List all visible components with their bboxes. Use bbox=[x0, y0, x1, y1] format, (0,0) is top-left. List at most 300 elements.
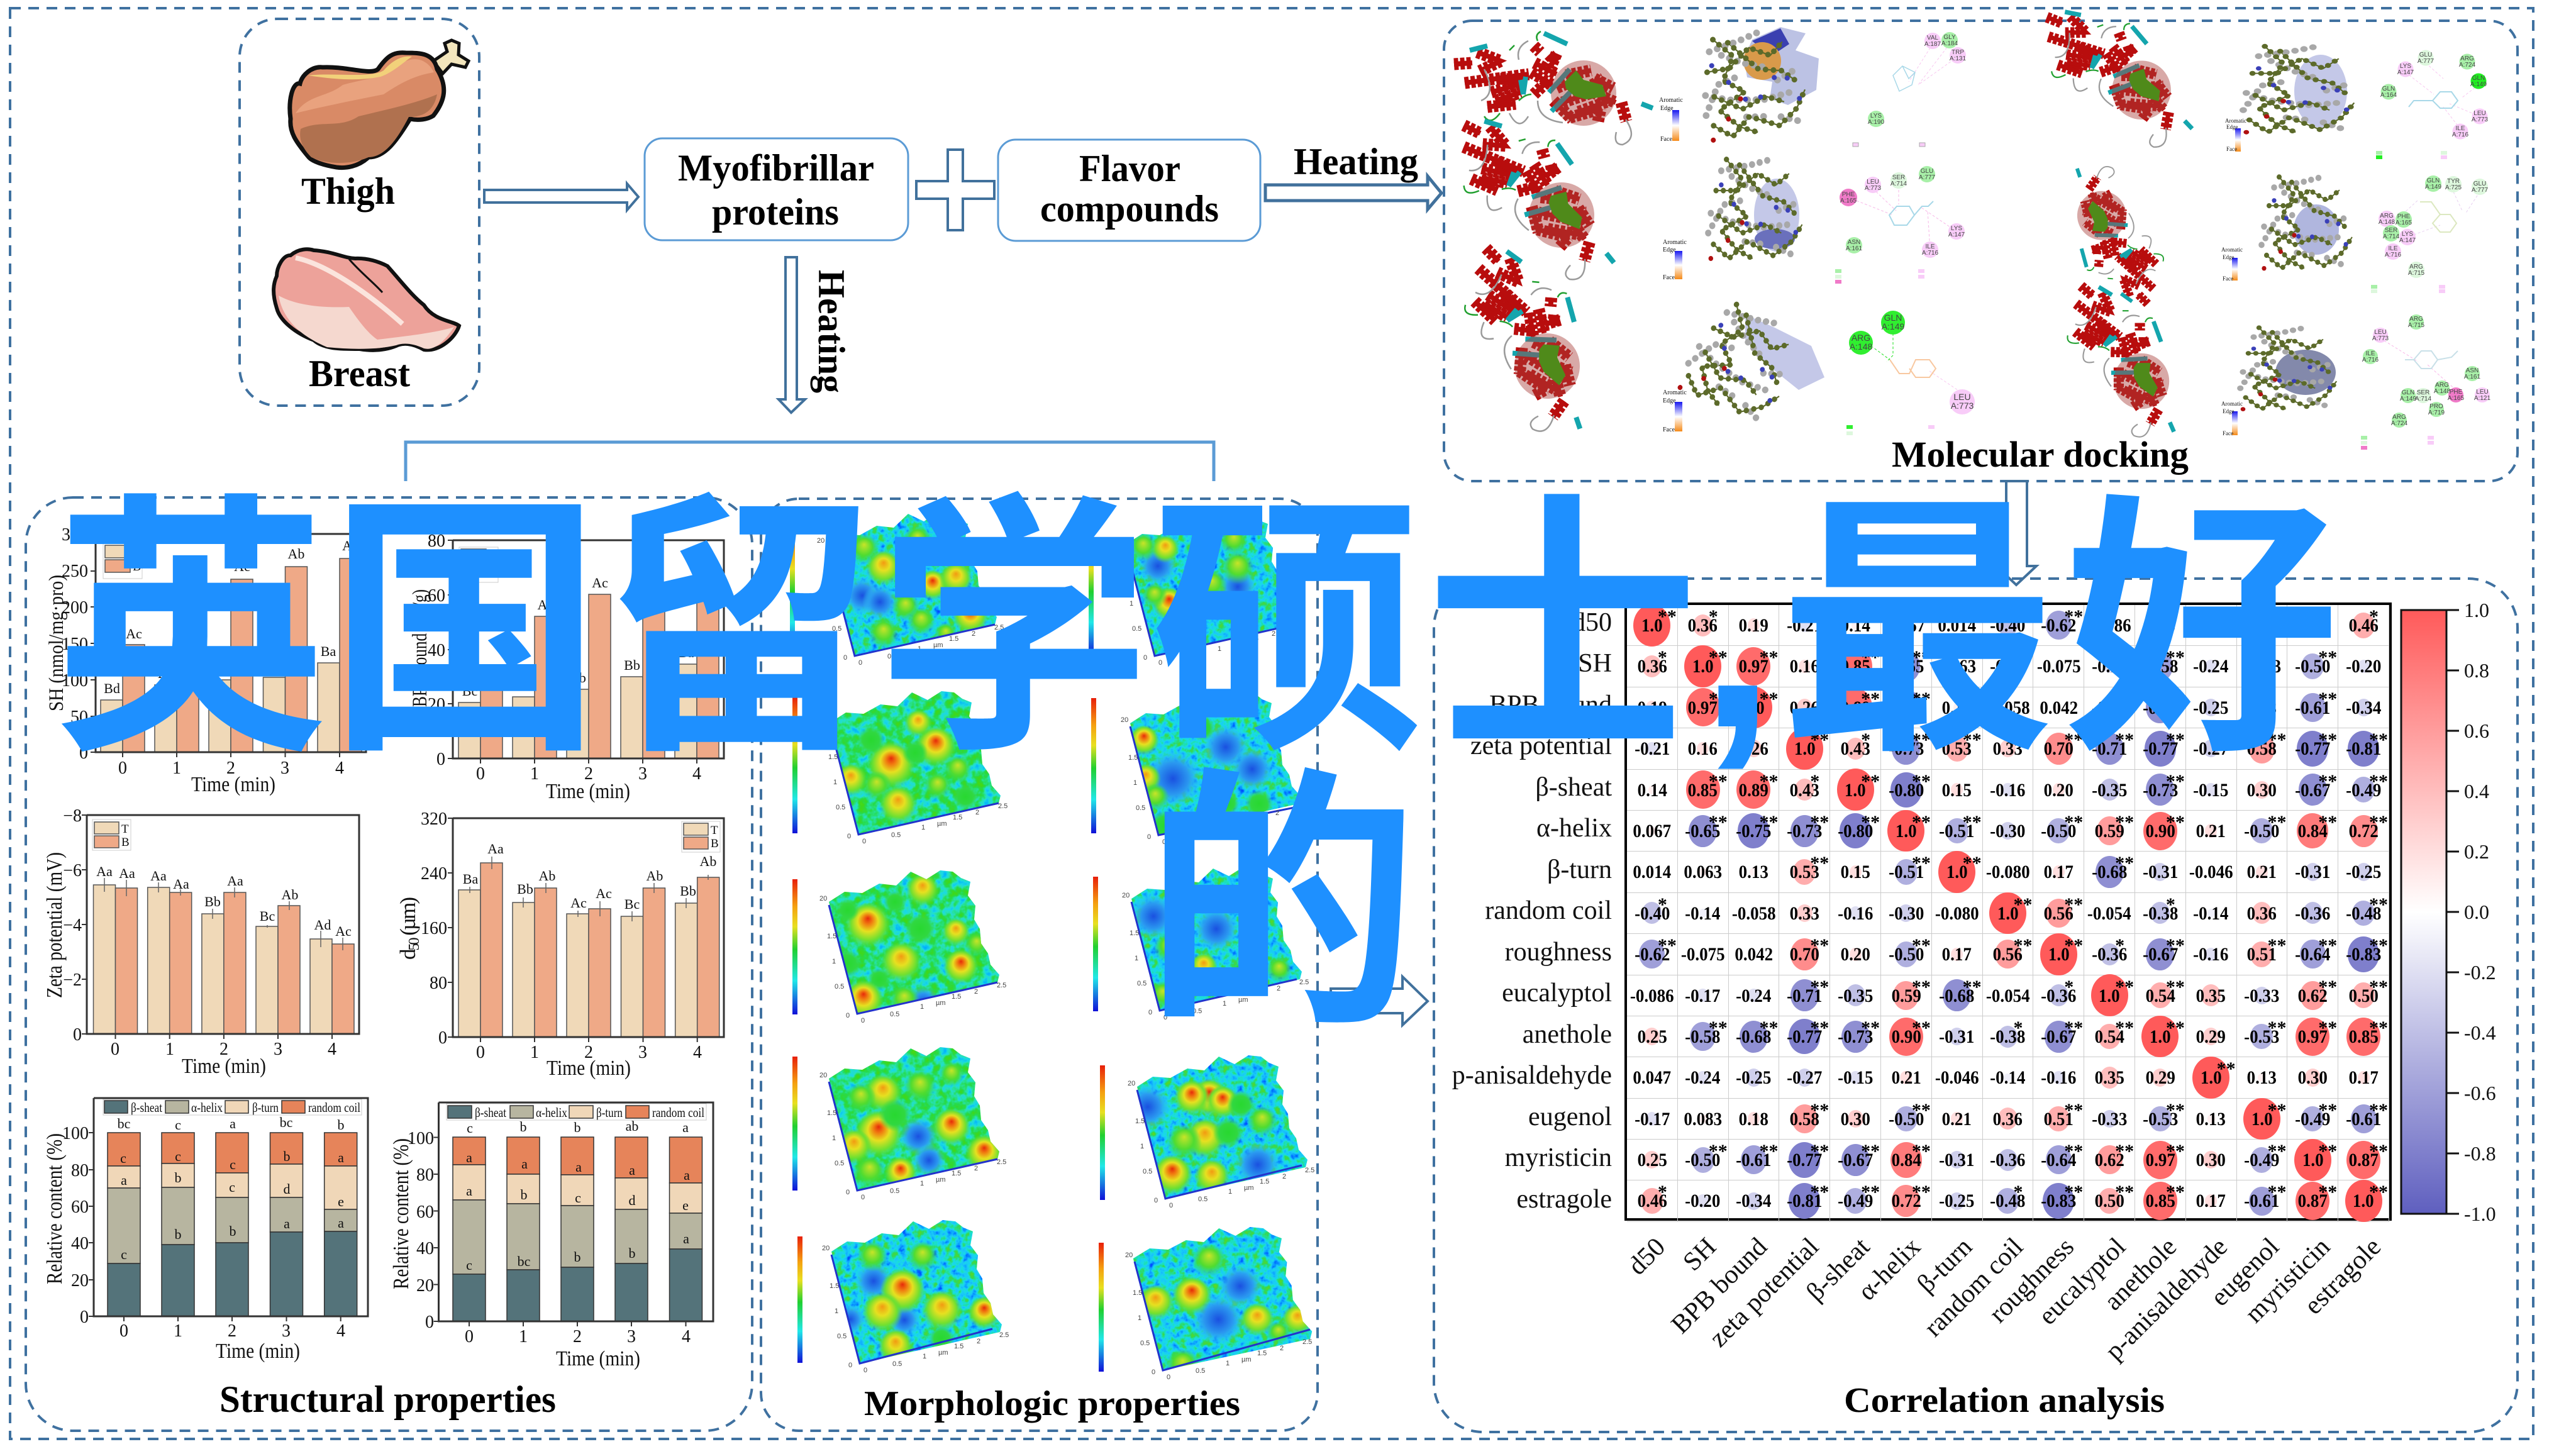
row: estragole: -0.83 bbox=[2041, 1191, 2076, 1211]
row: eugenol: ** bbox=[2064, 1100, 2083, 1121]
chart: secondary structure breast: ab bbox=[626, 1118, 638, 1134]
row: eucalyptol: ** bbox=[2369, 977, 2388, 997]
panel border: correlation bbox=[1434, 579, 2518, 1432]
row: random coil: -0.48 bbox=[2346, 903, 2381, 924]
chart: BPB bound: Time (min) bbox=[546, 780, 630, 803]
row: d50: -0.40 bbox=[1990, 615, 2026, 636]
row: eucalyptol: ** bbox=[1963, 977, 1982, 997]
row: myristicin: ** bbox=[2115, 1141, 2134, 1162]
row: beta-sheat: -0.15 bbox=[2194, 780, 2229, 801]
row: BPB bound: -0.68 bbox=[2143, 697, 2178, 718]
chart: SH: Bc bbox=[158, 665, 173, 681]
diagram row 1 right: A:777 bbox=[2418, 58, 2434, 65]
row: myristicin: 0.25 bbox=[1637, 1150, 1667, 1170]
row: estragole: ** bbox=[2064, 1182, 2083, 1202]
row: zeta potential bbox=[1627, 728, 2389, 770]
chart: secondary structure breast: 2 bbox=[573, 1327, 582, 1346]
chart: secondary structure thigh: a bbox=[121, 1172, 127, 1188]
row: d50: ** bbox=[2064, 606, 2083, 627]
row: zeta potential: -0.81 bbox=[2346, 738, 2381, 759]
row: anethole: 0.97 bbox=[2298, 1026, 2328, 1047]
diagram row 2 left: LEU bbox=[1867, 179, 1879, 186]
matrix row labels: β-turn bbox=[1547, 855, 1612, 884]
row: SH: ** bbox=[1759, 647, 1778, 668]
chart: zeta potential: 4 bbox=[328, 1040, 336, 1059]
row: estragole: -0.49 bbox=[1838, 1191, 1873, 1211]
chart: BPB bound: 20 bbox=[428, 695, 445, 714]
label: structural properties: Structural properties bbox=[219, 1379, 556, 1420]
matrix column labels: β-sheat bbox=[1801, 1232, 1875, 1307]
matrix row labels: eucalyptol bbox=[1502, 979, 1612, 1008]
row: roughness: -0.62 bbox=[1635, 944, 1670, 965]
row: SH: 0.063 bbox=[1938, 656, 1976, 677]
matrix row labels: eugenol bbox=[1528, 1102, 1612, 1131]
row: d50: 0.14 bbox=[1840, 615, 1870, 636]
matrix column labels: p-anisaldehyde bbox=[2100, 1233, 2233, 1366]
chart: secondary structure thigh: d bbox=[283, 1181, 291, 1197]
AFM surface row 4 left bbox=[823, 1220, 1009, 1372]
chart: zeta potential: 2 bbox=[219, 1040, 228, 1059]
row: p-anisaldehyde: -0.15 bbox=[1838, 1067, 1873, 1088]
chart: BPB bound: Bc bbox=[462, 683, 477, 699]
docking colorbars: Face bbox=[2223, 275, 2233, 282]
row: estragole: 0.72 bbox=[1891, 1191, 1921, 1211]
diagram row 1 right: ARG bbox=[2460, 55, 2474, 62]
row: myristicin: -0.67 bbox=[1838, 1150, 1873, 1170]
row: eucalyptol: 0.50 bbox=[2348, 985, 2379, 1006]
row: BPB bound: ** bbox=[2318, 689, 2337, 709]
row: beta-sheat: -0.80 bbox=[1889, 780, 1924, 801]
legend: T bbox=[121, 823, 129, 836]
chart: SH: 150 bbox=[62, 635, 88, 654]
row: anethole: ** bbox=[1861, 1018, 1880, 1038]
diagram row 1 right: LYS bbox=[2400, 63, 2411, 70]
row: beta-turn: 0.21 bbox=[2247, 862, 2277, 882]
panel: structural properties bbox=[26, 497, 752, 1431]
row: random coil: -0.054 bbox=[2087, 903, 2131, 924]
chart: d50: 4 bbox=[693, 1043, 702, 1062]
chart: d50: 0 bbox=[438, 1028, 447, 1048]
row: zeta potential: 1.0 bbox=[1794, 738, 1815, 759]
AFM surface row 0 left bbox=[818, 514, 1004, 665]
diagram row 2 right: A:149 bbox=[2425, 184, 2442, 191]
matrix column labels: random coil bbox=[1919, 1233, 2029, 1343]
row: d50: * bbox=[2369, 606, 2379, 627]
row: roughness: ** bbox=[1658, 935, 1677, 956]
row: alpha-helix: 0.067 bbox=[1633, 821, 1671, 841]
chart: secondary structure thigh: 80 bbox=[71, 1161, 89, 1180]
row: random coil: -0.36 bbox=[2295, 903, 2330, 924]
bracket bbox=[406, 442, 1214, 481]
row: eugenol: -0.53 bbox=[2143, 1109, 2178, 1130]
row: BPB bound: -0.61 bbox=[2295, 697, 2330, 718]
diagram row 3 right: LEU bbox=[2374, 329, 2387, 336]
chart: secondary structure breast: b bbox=[519, 1119, 527, 1135]
chart: secondary structure breast: 40 bbox=[416, 1239, 434, 1258]
row: beta-turn bbox=[1627, 851, 2389, 893]
row: SH: ** bbox=[1912, 647, 1931, 668]
chart: BPB bound: 1 bbox=[530, 764, 539, 784]
row: eugenol: 1.0 bbox=[2251, 1109, 2272, 1130]
diagram row 2 right: ARG bbox=[2409, 264, 2423, 270]
row: zeta potential: ** bbox=[1963, 730, 1982, 750]
row: eucalyptol: -0.71 bbox=[1787, 985, 1822, 1006]
row: eugenol: 0.30 bbox=[1840, 1109, 1870, 1130]
row: BPB bound: -0.75 bbox=[1889, 697, 1924, 718]
row: estragole: 0.17 bbox=[2196, 1191, 2226, 1211]
row: BPB bound: ** bbox=[2166, 689, 2185, 709]
docking colorbars: Aromatic bbox=[2225, 118, 2246, 124]
row: beta-sheat: 1.0 bbox=[1845, 780, 1866, 801]
row: roughness: ** bbox=[2064, 935, 2083, 956]
row: p-anisaldehyde: -0.046 bbox=[1935, 1067, 1979, 1088]
docking colorbars: Aromatic bbox=[2221, 401, 2243, 407]
box: myofibrillar proteins: proteins bbox=[712, 191, 839, 233]
diagram row 3 right: PRO bbox=[2429, 403, 2443, 410]
chart: SH: Bd bbox=[104, 680, 120, 696]
correlation colorbar bbox=[2401, 599, 2496, 1225]
chart: SH: 4 bbox=[335, 758, 344, 778]
row: beta-turn: -0.51 bbox=[1889, 862, 1924, 882]
chart: d50: Aa bbox=[487, 841, 504, 857]
row: SH: ** bbox=[2166, 647, 2185, 668]
chart: secondary structure breast: a bbox=[629, 1162, 635, 1178]
chart: secondary structure thigh: Time (min) bbox=[216, 1340, 300, 1363]
diagram row 3 right: A:165 bbox=[2448, 395, 2465, 402]
row: eugenol: 0.13 bbox=[2196, 1109, 2226, 1130]
docking colorbars: Face bbox=[1663, 426, 1675, 433]
chart: secondary structure thigh: 100 bbox=[62, 1124, 89, 1143]
chart: BPB bound: 0 bbox=[476, 764, 485, 784]
diagram row 2 right: PHE bbox=[2397, 213, 2411, 220]
AFM colorbars bbox=[790, 522, 1105, 1372]
row: myristicin: ** bbox=[1912, 1141, 1931, 1162]
row: random coil: -0.38 bbox=[2143, 903, 2178, 924]
row: anethole: -0.77 bbox=[1787, 1026, 1822, 1047]
chart: secondary structure thigh: c bbox=[175, 1117, 181, 1133]
chart: BPB bound: BPB bound (µg/g) bbox=[409, 589, 431, 707]
diagram row 2 left: SER bbox=[1892, 174, 1905, 181]
matrix row labels: SH bbox=[1578, 649, 1612, 678]
overlay headline: 英国留学硕士,最好 bbox=[54, 479, 2339, 785]
legend: β-turn bbox=[596, 1105, 623, 1120]
row: myristicin: -0.50 bbox=[1685, 1150, 1721, 1170]
row: eugenol: 0.36 bbox=[1993, 1109, 2023, 1130]
legend: B bbox=[711, 837, 719, 850]
row: myristicin: -0.61 bbox=[1736, 1150, 1772, 1170]
chart: secondary structure breast: e bbox=[682, 1197, 689, 1213]
row: eucalyptol: ** bbox=[1810, 977, 1829, 997]
chart: BPB bound: 4 bbox=[692, 764, 701, 784]
matrix column labels: BPB bound bbox=[1666, 1233, 1773, 1340]
box: myofibrillar proteins: Myofibrillar bbox=[678, 147, 874, 189]
row: alpha-helix: ** bbox=[1912, 812, 1931, 833]
diagram row 1 left: GLY bbox=[1943, 34, 1956, 41]
row: anethole bbox=[1627, 1016, 2389, 1057]
row: d50: -0.21 bbox=[1787, 615, 1822, 636]
row: beta-sheat: 0.43 bbox=[1790, 780, 1819, 801]
chart: secondary structure thigh: Relative content (%) bbox=[42, 1133, 67, 1284]
chart: zeta potential bbox=[42, 806, 359, 1078]
chart: secondary structure breast: 1 bbox=[519, 1327, 528, 1346]
icon: chicken thigh bbox=[290, 40, 469, 168]
row: SH: -0.075 bbox=[2036, 656, 2080, 677]
row: anethole: ** bbox=[2267, 1018, 2286, 1038]
matrix column labels: zeta potential bbox=[1704, 1233, 1824, 1353]
row: beta-turn: -0.31 bbox=[2143, 862, 2178, 882]
chart: BPB bound: Cb bbox=[570, 670, 586, 686]
row: p-anisaldehyde: -0.25 bbox=[1736, 1067, 1772, 1088]
chart: d50: 0 bbox=[476, 1043, 485, 1062]
row: beta-turn: -0.31 bbox=[2295, 862, 2330, 882]
AFM surface row 3 right bbox=[1128, 1055, 1314, 1208]
row: alpha-helix: 1.0 bbox=[1896, 821, 1917, 841]
chart: secondary structure breast: b bbox=[574, 1249, 581, 1265]
row: zeta potential: -0.73 bbox=[1889, 738, 1924, 759]
chart: zeta potential: Bb bbox=[204, 894, 221, 909]
legend: random coil bbox=[308, 1100, 360, 1115]
arrow: heating to docking bbox=[1265, 176, 1441, 209]
row: estragole: -0.48 bbox=[1990, 1191, 2026, 1211]
row: anethole: ** bbox=[1912, 1018, 1931, 1038]
chart: SH: 2 bbox=[226, 758, 235, 778]
chart: BPB bound: 3 bbox=[638, 764, 647, 784]
icon: chicken breast bbox=[274, 249, 459, 350]
row: anethole: ** bbox=[2115, 1018, 2134, 1038]
row: eugenol: 0.51 bbox=[2044, 1109, 2074, 1130]
row: alpha-helix: ** bbox=[1709, 812, 1728, 833]
panel border: morphologic bbox=[761, 499, 1318, 1431]
chart: secondary structure breast: a bbox=[575, 1159, 582, 1175]
row: eugenol: -0.49 bbox=[2295, 1109, 2330, 1130]
row: beta-turn: 0.13 bbox=[1739, 862, 1768, 882]
diagram row 1 right: A:773 bbox=[2472, 116, 2489, 123]
row: alpha-helix: 0.72 bbox=[2348, 821, 2379, 841]
chart: d50: 160 bbox=[421, 919, 447, 938]
row: anethole: ** bbox=[1759, 1018, 1778, 1038]
matrix column labels: d50 bbox=[1623, 1233, 1671, 1281]
chart: secondary structure breast bbox=[389, 1102, 713, 1370]
chart: SH: 50 bbox=[70, 708, 88, 727]
row: myristicin: -0.36 bbox=[1990, 1150, 2026, 1170]
row: alpha-helix: -0.30 bbox=[1990, 821, 2026, 841]
row: random coil: 1.0 bbox=[1997, 903, 2018, 924]
AFM surface row 2 left bbox=[820, 870, 1006, 1023]
row: myristicin: ** bbox=[1759, 1141, 1778, 1162]
correlation colorbar: 0.4 bbox=[2464, 780, 2489, 802]
row: beta-sheat: 0.89 bbox=[1739, 780, 1768, 801]
row: estragole: -0.20 bbox=[1685, 1191, 1721, 1211]
row: eucalyptol: 0.62 bbox=[2298, 985, 2328, 1006]
row: BPB bound: -0.24 bbox=[2092, 697, 2127, 718]
row: estragole: 0.50 bbox=[2094, 1191, 2124, 1211]
correlation colorbar: 0.0 bbox=[2464, 901, 2489, 923]
matrix row labels: random coil bbox=[1485, 896, 1612, 925]
row: random coil: -0.058 bbox=[1732, 903, 1775, 924]
row: anethole: * bbox=[2013, 1018, 2023, 1038]
row: alpha-helix: 0.59 bbox=[2094, 821, 2124, 841]
chart: secondary structure thigh: b bbox=[337, 1117, 345, 1133]
docking row 1 right bbox=[2016, 0, 2354, 158]
chart: SH: 200 bbox=[62, 598, 88, 618]
row: zeta potential: 0.16 bbox=[1688, 738, 1718, 759]
row: beta-sheat: 0.14 bbox=[1637, 780, 1667, 801]
row: d50: 1.0 bbox=[1641, 615, 1663, 636]
row: random coil: -0.30 bbox=[1889, 903, 1924, 924]
diagram row 2 left: A:147 bbox=[1948, 231, 1965, 238]
matrix column labels: eugenol bbox=[2206, 1233, 2285, 1312]
row: alpha-helix: ** bbox=[1810, 812, 1829, 833]
row: alpha-helix: -0.50 bbox=[2041, 821, 2076, 841]
panel border: docking bbox=[1444, 21, 2518, 481]
diagram row 3 right: A:719 bbox=[2428, 409, 2445, 416]
chart: BPB bound: Da bbox=[516, 677, 532, 693]
correlation colorbar: -0.2 bbox=[2464, 961, 2496, 984]
row: p-anisaldehyde: 0.17 bbox=[2348, 1067, 2379, 1088]
chart: secondary structure breast: 0 bbox=[465, 1327, 474, 1346]
row: SH bbox=[1627, 645, 2389, 687]
chart: secondary structure breast: d bbox=[629, 1192, 635, 1208]
diagram row 3 right: A:148 bbox=[2434, 388, 2451, 395]
row: roughness: -0.075 bbox=[1681, 944, 1725, 965]
row: eucalyptol: -0.68 bbox=[1940, 985, 1975, 1006]
row: zeta potential: ** bbox=[2318, 730, 2337, 750]
row: SH: 0.083 bbox=[2243, 656, 2281, 677]
panel: correlation analysis bbox=[1434, 579, 2518, 1432]
row: SH: 0.16 bbox=[1790, 656, 1819, 677]
legend: β-sheat bbox=[475, 1105, 506, 1120]
row: BPB bound bbox=[1637, 687, 2389, 728]
row: BPB bound: 0.042 bbox=[2040, 697, 2078, 718]
row: estragole: * bbox=[1658, 1182, 1667, 1202]
diagram row 2 right: A:715 bbox=[2408, 270, 2425, 277]
row: myristicin: 1.0 bbox=[2302, 1150, 2323, 1170]
chart: zeta potential: 0 bbox=[73, 1025, 82, 1045]
chart: secondary structure thigh: b bbox=[229, 1223, 236, 1239]
diagram row 2 left: A:714 bbox=[1890, 180, 1907, 187]
legend bbox=[103, 543, 142, 579]
matrix column labels bbox=[1623, 1232, 2387, 1366]
row: BPB bound: 0.97 bbox=[1688, 697, 1718, 718]
panel border: raw materials bbox=[240, 19, 479, 406]
row: myristicin bbox=[1627, 1139, 2389, 1181]
row: anethole: ** bbox=[2064, 1018, 2083, 1038]
row: beta-sheat: -0.73 bbox=[2143, 780, 2178, 801]
chart: SH: Ba bbox=[321, 643, 336, 659]
row: myristicin: ** bbox=[1810, 1141, 1829, 1162]
row: d50: 0.19 bbox=[1739, 615, 1768, 636]
row: anethole: ** bbox=[2318, 1018, 2337, 1038]
row: beta-sheat: ** bbox=[2166, 771, 2185, 792]
diagram row 3 right: ASN bbox=[2466, 367, 2479, 374]
row: anethole: -0.73 bbox=[1838, 1026, 1873, 1047]
row: random coil: ** bbox=[2369, 894, 2388, 915]
row: beta-sheat: 0.30 bbox=[2247, 780, 2277, 801]
row: beta-turn: 0.014 bbox=[1633, 862, 1671, 882]
chart: zeta potential: −8 bbox=[63, 806, 82, 826]
diagram row 2 right: A:777 bbox=[2472, 187, 2489, 194]
docking row 1 left bbox=[1454, 25, 1819, 145]
row: anethole: ** bbox=[2369, 1018, 2388, 1038]
row: anethole: -0.38 bbox=[1990, 1026, 2026, 1047]
AFM surface row 4 right bbox=[1126, 1227, 1312, 1379]
diagram row 2 left: A:161 bbox=[1846, 245, 1863, 252]
diagram row 1 left bbox=[1853, 32, 1967, 147]
chart: secondary structure thigh: a bbox=[284, 1216, 290, 1231]
label: breast: Breast bbox=[309, 353, 410, 394]
correlation colorbar: 0.2 bbox=[2464, 840, 2489, 863]
diagram row 3 right: A:715 bbox=[2408, 322, 2425, 329]
row: beta-sheat: ** bbox=[1709, 771, 1728, 792]
row: roughness: ** bbox=[1810, 935, 1829, 956]
row: beta-sheat: -0.67 bbox=[2295, 780, 2330, 801]
chart: secondary structure thigh: a bbox=[338, 1215, 344, 1231]
chart: secondary structure thigh: 2 bbox=[228, 1321, 236, 1341]
diagram row 1 right: A:164 bbox=[2380, 92, 2397, 99]
row: eugenol: 0.21 bbox=[1942, 1109, 1972, 1130]
chart: secondary structure thigh: 3 bbox=[282, 1321, 291, 1341]
chart: secondary structure breast: 100 bbox=[408, 1129, 434, 1148]
row: myristicin: ** bbox=[2267, 1141, 2286, 1162]
legend bbox=[103, 1099, 362, 1115]
row: SH: 0.97 bbox=[1739, 656, 1768, 677]
chart: d50: 50 bbox=[406, 937, 423, 950]
row: alpha-helix: ** bbox=[1963, 812, 1982, 833]
row: estragole: ** bbox=[2318, 1182, 2337, 1202]
matrix row labels: BPB bound bbox=[1489, 691, 1612, 719]
diagram row 3 left: A:148 bbox=[1850, 341, 1873, 352]
diagram row 1 left: A:190 bbox=[1868, 119, 1885, 126]
row: myristicin: 0.87 bbox=[2348, 1150, 2379, 1170]
AFM surface row 0 right bbox=[1130, 521, 1277, 665]
row: alpha-helix: -0.65 bbox=[1685, 821, 1721, 841]
chart: zeta potential: −6 bbox=[63, 861, 82, 880]
diagram row 1 right: A:147 bbox=[2397, 69, 2414, 76]
docking colorbars: Edge bbox=[2223, 254, 2234, 260]
docking row 2 left bbox=[1424, 97, 1802, 294]
arrow: raw materials to proteins bbox=[484, 184, 638, 210]
row: SH: -0.17 bbox=[2092, 656, 2127, 677]
row: estragole: -0.34 bbox=[1736, 1191, 1772, 1211]
chart: BPB bound: Ac bbox=[592, 575, 608, 591]
row: BPB bound: 0.89 bbox=[1840, 697, 1870, 718]
diagram row 3 right: A:773 bbox=[2372, 335, 2389, 342]
chart: d50: 2 bbox=[584, 1043, 593, 1062]
row: anethole: -0.68 bbox=[1736, 1026, 1772, 1047]
diagram row 2 left: PHE bbox=[1842, 191, 1855, 198]
row: eugenol: ** bbox=[2369, 1100, 2388, 1121]
diagram row 3 right: ILE bbox=[2365, 350, 2375, 357]
chart: secondary structure thigh bbox=[42, 1098, 368, 1363]
row: roughness bbox=[1627, 933, 2389, 975]
arrow: heating down bbox=[779, 257, 805, 413]
legend: α-helix bbox=[536, 1105, 567, 1120]
overlay headline: 的 bbox=[1145, 752, 1419, 1058]
diagram row 2 right: A:147 bbox=[2399, 237, 2416, 244]
diagram row 2 left: A:773 bbox=[1865, 185, 1882, 192]
chart: zeta potential: Zeta potential (mV) bbox=[42, 852, 67, 998]
legend bbox=[682, 821, 720, 852]
row: beta-turn: 1.0 bbox=[1946, 862, 1968, 882]
row: eucalyptol: 0.59 bbox=[1891, 985, 1921, 1006]
diagram row 2 right: TYR bbox=[2447, 178, 2460, 185]
chart: d50: 1 bbox=[530, 1043, 539, 1062]
AFM surface row 2 right bbox=[1122, 869, 1309, 1019]
row: SH: ** bbox=[1709, 647, 1728, 668]
row: myristicin: ** bbox=[1861, 1141, 1880, 1162]
legend: α-helix bbox=[191, 1100, 223, 1115]
row: estragole: * bbox=[2013, 1182, 2023, 1202]
